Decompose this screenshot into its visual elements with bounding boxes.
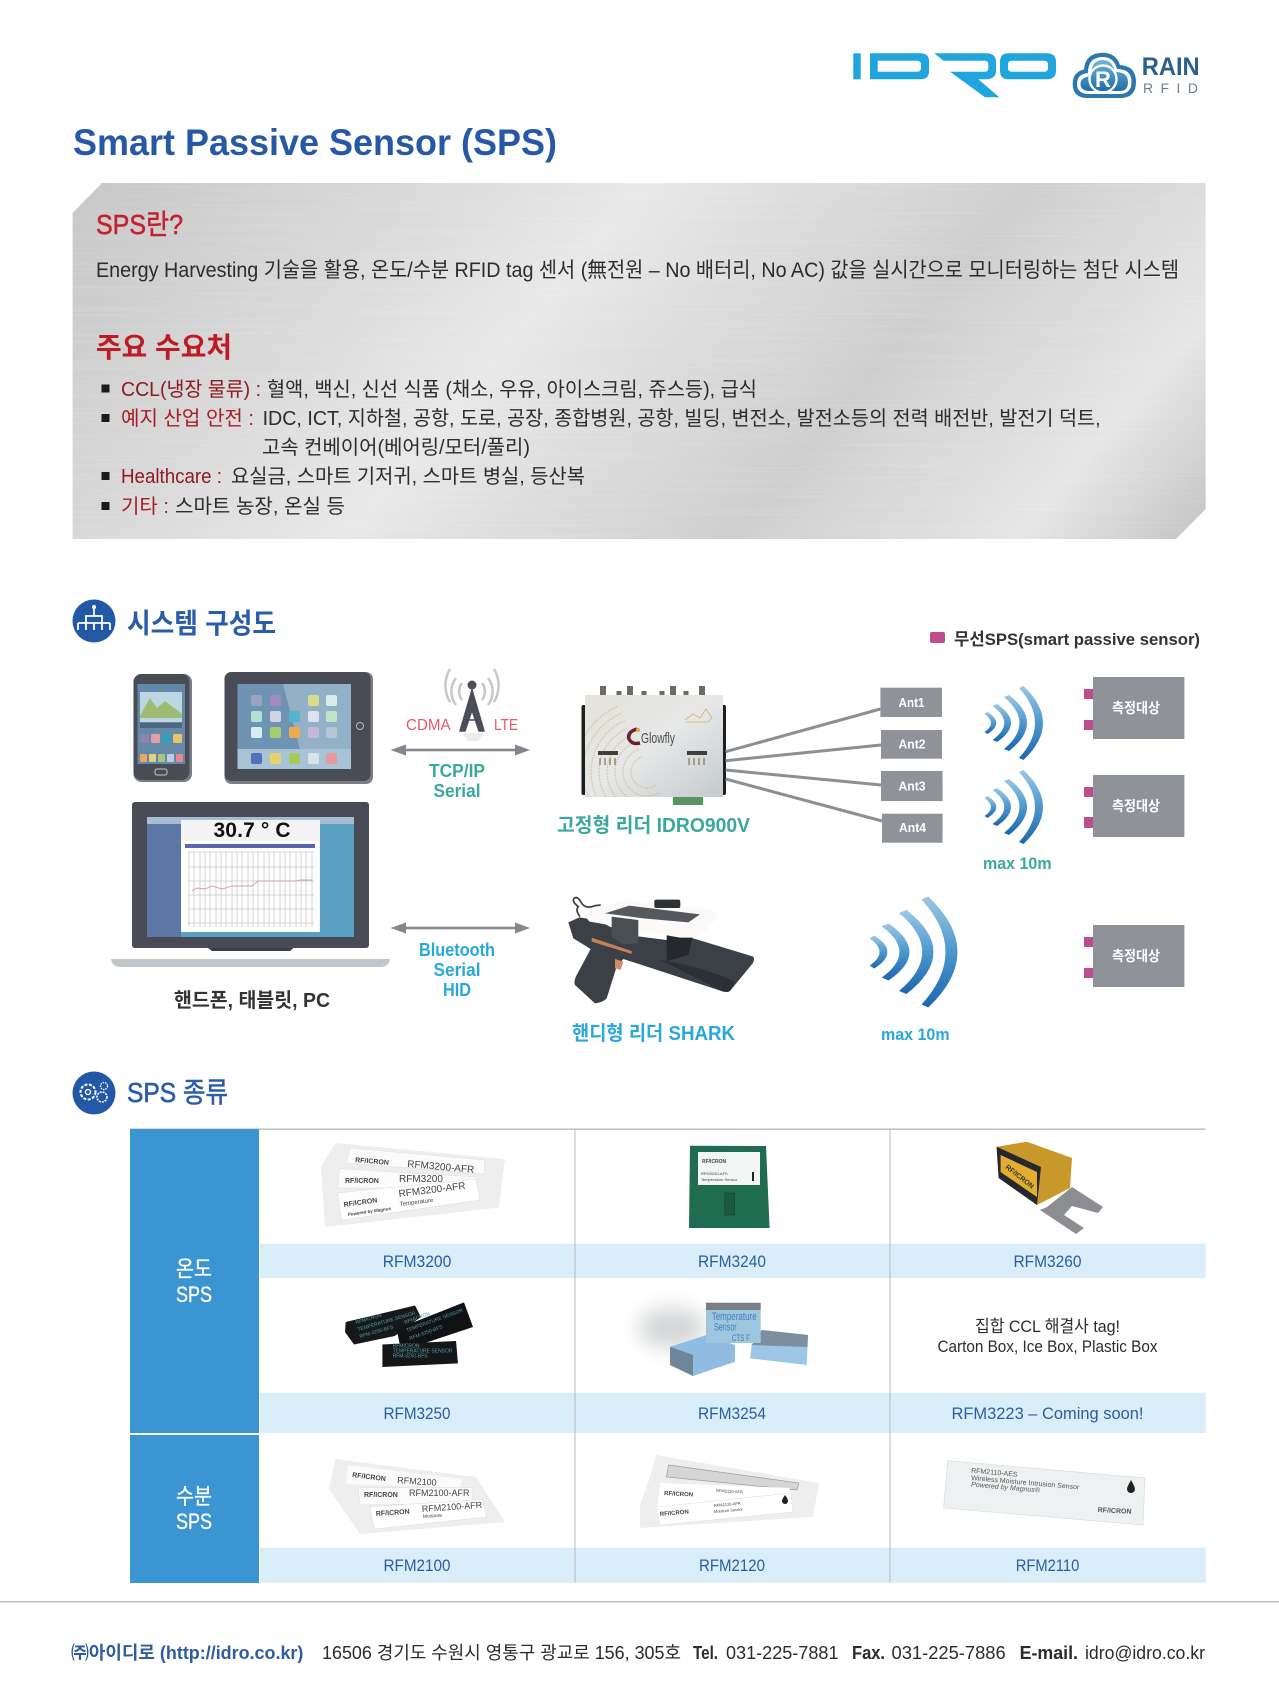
row header: moisture SPS: SPS (176, 1509, 212, 1534)
label: Bluetooth Serial HID: Serial (434, 960, 480, 980)
product image: RFM2120 tags: RF/ICRON (660, 1509, 689, 1518)
product image: RFM2120 tags: RFM2120-AFR (714, 1501, 741, 1508)
icon: smartphone (134, 674, 192, 782)
icon: system hierarchy (72, 600, 116, 642)
product image: RFM3254 tags (638, 1303, 808, 1376)
icon: cell tower (445, 669, 499, 741)
list: demand areas: CCL(냉장 물류) : (121, 378, 261, 401)
product image: RFM3200 tags (321, 1143, 505, 1227)
product image: RFM3240 tag: Temperature Sensor (701, 1177, 738, 1182)
product image: RFM3240 tag (689, 1146, 770, 1228)
label: RFM3240: RFM3240 (698, 1252, 766, 1271)
list: demand areas: 스마트 농장, 온실 등 (175, 495, 345, 518)
antennas: Ant4 (899, 820, 927, 835)
label: RFM3260: RFM3260 (1014, 1252, 1082, 1271)
product image: RFM3200 tags: RF/ICRON (343, 1197, 378, 1209)
label: RFM3250: RFM3250 (384, 1404, 450, 1423)
icon: fixed reader IDRO900V (582, 686, 726, 805)
product image: RFM3260 tag (997, 1142, 1103, 1234)
list: demand areas (102, 378, 1101, 518)
product image: RFM3250 tags: RFM-3250-BFS (393, 1354, 428, 1360)
product image: RFM2100 tags: RFM2100-AFR (409, 1488, 470, 1498)
label: RFM3200: RFM3200 (383, 1252, 451, 1271)
label: Bluetooth Serial HID: Bluetooth (419, 940, 495, 960)
target: measurement object 3: 측정대상 (1112, 948, 1160, 964)
table frame (130, 1128, 1206, 1583)
heading: main demand: 주요 수요처 (96, 332, 232, 363)
text: SPS description: Energy Harvesting 기술을 활용, 온도/수분 RFID tag 센서 (無전원 – No 배터리, No AC) 값을 실시간으로 모니터링하는 첨단 시스템 (96, 259, 1179, 282)
product image: RFM2110 tag: Powered by Magnus® (971, 1481, 1041, 1495)
icon: cloud: R (1095, 67, 1111, 92)
label: Bluetooth Serial HID (419, 940, 495, 1000)
chart readout: 30.7 ° C (214, 819, 290, 842)
product image: RFM2110 tag: RF/ICRON (1097, 1507, 1132, 1516)
product image: RFM3200 tags: RFM3200-AFR (398, 1181, 466, 1200)
product image: RFM2110 tag: Wireless Moisture Intrusion Sensor (971, 1475, 1080, 1492)
list: demand areas: 예지 산업 안전 : (121, 407, 254, 430)
label: RFM2110: RFM2110 (1016, 1556, 1079, 1575)
product image: RFM2110 tag (944, 1461, 1145, 1525)
reader brand: Glowfly (641, 730, 675, 747)
text: RFM3223 description: 집합 CCL 해결사 tag! (975, 1317, 1120, 1336)
panel: SPS overview (73, 183, 1206, 539)
product image: RFM2120 tags: Moisture Sensor (714, 1506, 744, 1514)
title: Smart Passive Sensor (SPS) (73, 122, 557, 163)
product image: RFM3240 tag: RFM3240-AFS (701, 1171, 728, 1176)
footer: company contact: 031-225-7886 (892, 1643, 1006, 1663)
table: SPS types (130, 1128, 1206, 1583)
product image: RFM2100 tags: RFM2100 (397, 1475, 437, 1488)
product image: RFM3250 tags: TEMPERATURE SENSOR (406, 1308, 464, 1334)
product image: RFM3200 tags: Temperature (400, 1198, 434, 1208)
logo: RAIN RFID (1073, 53, 1200, 98)
heading: system configuration: 시스템 구성도 (127, 608, 276, 639)
label: range handheld: max 10m (881, 1025, 950, 1044)
product image: RFM3200 tags: RF/ICRON (345, 1178, 379, 1185)
product image: RFM3250 tags: RFM-3250-BFS (359, 1324, 395, 1340)
label: devices: 핸드폰, 태블릿, PC (174, 989, 330, 1012)
target: measurement object 1: 측정대상 (1112, 700, 1160, 716)
antennas (880, 688, 943, 843)
product image: RFM3200 tags: RFM3200-AFR (407, 1159, 475, 1176)
list: demand areas: IDC, ICT, 지하철, 공항, 도로, 공장, 종합병원, 공항, 빌딩, 변전소, 발전소등의 전력 배전반, 발전기 덕트, (263, 407, 1101, 430)
footer: company contact: Fax. (852, 1643, 885, 1663)
row header: temperature SPS: 온도 (176, 1256, 212, 1282)
row header: moisture SPS (130, 1435, 259, 1583)
icon: tablet (224, 672, 373, 784)
product image: RFM3200 tags: Powered by Magnus (347, 1206, 392, 1217)
product image: RFM3200 tags: RFM3200 (399, 1174, 443, 1185)
list: demand areas: 혈액, 백신, 신선 식품 (채소, 우유, 아이스크림, 쥬스등), 급식 (267, 378, 757, 401)
target: measurement object 2 (1084, 775, 1184, 837)
product image: RFM2100 tags: RF/ICRON (376, 1509, 410, 1518)
logo: RAIN RFID: RAIN (1142, 53, 1200, 81)
icon: gears (72, 1072, 116, 1114)
target: measurement object 3 (1084, 925, 1184, 987)
footer: company contact: idro@idro.co.kr (1085, 1643, 1205, 1663)
row header: moisture SPS: 수분 (176, 1484, 212, 1509)
product image: RFM3250 tags: TEMPERATURE SENSOR (357, 1311, 417, 1333)
footer: company contact (71, 1643, 1205, 1663)
product image: RFM2100 tags: RFM2100-AFR (421, 1500, 483, 1514)
text: RFM3223 description (938, 1317, 1158, 1356)
panel background (73, 183, 1206, 539)
product image: RFM3250 tags: RFMICRON (355, 1313, 383, 1326)
icon: laptop with temperature chart (111, 802, 390, 967)
product image: RFM2100 tags: Moisture (423, 1513, 442, 1520)
row header: temperature SPS (130, 1129, 259, 1433)
logo: RAIN RFID: RFID (1143, 80, 1198, 96)
product image: RFM2100 tags: RF/ICRON (364, 1492, 398, 1499)
label: TCP/IP Serial: TCP/IP (429, 761, 485, 781)
product image: RFM2120 tags (640, 1455, 819, 1528)
product image: RFM2100 tags (329, 1459, 505, 1534)
list: demand areas: Healthcare : (121, 466, 222, 488)
label: fixed reader: 고정형 리더 IDRO900V (557, 814, 751, 837)
footer: company contact: ㈜아이디로 (http://idro.co.kr) (71, 1643, 303, 1663)
antennas: Ant3 (898, 778, 926, 794)
label: range fixed reader: max 10m (983, 854, 1052, 873)
arrow: TCP/IP link (391, 744, 530, 756)
product image: RFM3250 tags: RFMICRON (393, 1344, 420, 1350)
product image: RFM3254 tags: CTS F (732, 1333, 750, 1343)
product image: RFM3260 tag: RF/ICRON (1004, 1164, 1035, 1190)
row header: temperature SPS: SPS (176, 1282, 212, 1307)
label: RFM2100: RFM2100 (384, 1556, 450, 1575)
label: RFM2120: RFM2120 (699, 1556, 765, 1575)
label: RFM3223: RFM3223 – Coming soon! (952, 1404, 1144, 1423)
connectors: reader to antennas (726, 709, 882, 821)
product image: RFM3254 tags: Sensor (714, 1322, 737, 1334)
label: Bluetooth Serial HID: HID (443, 980, 471, 1000)
label: LTE: LTE (494, 717, 518, 734)
legend: wireless SPS: 무선SPS(smart passive sensor) (954, 630, 1200, 649)
product image: RFM3250 tags: TEMPERATURE SENSOR (393, 1348, 453, 1354)
product image: RFM3240 tag: RF/ICRON (702, 1159, 727, 1165)
arrow: Bluetooth link (391, 922, 530, 934)
product image: RFM3250 tags: RFM-3250-BFS (409, 1324, 444, 1342)
product image: RFM2100 tags: RF/ICRON (352, 1472, 386, 1483)
text: RFM3223 description: Carton Box, Ice Box, Plastic Box (938, 1337, 1158, 1356)
icon: handheld reader SHARK (568, 898, 754, 1003)
product image: RFM2120 tags: RF/ICRON (664, 1491, 693, 1499)
list: demand areas: 기타 : (121, 495, 169, 518)
antennas: Ant2 (898, 736, 926, 752)
label: CDMA: CDMA (406, 717, 451, 734)
heading: SPS types: SPS 종류 (127, 1077, 228, 1108)
product image: RFM3254 tags: Temperature (712, 1311, 757, 1323)
icon: radio waves upper (984, 686, 1043, 760)
logo: IDRO (853, 53, 1056, 97)
product image: RFM2120 tags: RFM2120-AFR (716, 1488, 743, 1494)
label: TCP/IP Serial (429, 761, 485, 801)
target: measurement object 1 (1084, 677, 1184, 739)
label: TCP/IP Serial: Serial (434, 781, 480, 801)
footer: company contact: 16506 경기도 수원시 영통구 광교로 156, 305호 (322, 1643, 681, 1663)
label: handheld reader: 핸디형 리더 SHARK (572, 1022, 736, 1045)
antennas: Ant1 (898, 695, 924, 710)
product image: RFM2110 tag: RFM2110-AES (971, 1468, 1018, 1479)
target: measurement object 2: 측정대상 (1112, 798, 1160, 814)
list: demand areas: 요실금, 스마트 기저귀, 스마트 병실, 등산복 (231, 465, 585, 488)
icon: radio waves large (870, 896, 958, 1008)
footer: company contact: E-mail. (1020, 1643, 1078, 1663)
product image: RFM3250 tags: RFMICRON (404, 1311, 431, 1326)
product image: RFM3250 tags (345, 1302, 473, 1367)
icon: radio waves lower (984, 770, 1043, 844)
label: RFM3254: RFM3254 (698, 1404, 766, 1423)
list: demand areas: 고속 컨베이어(베어링/모터/풀리) (262, 436, 530, 459)
footer: company contact: Tel. (693, 1643, 718, 1663)
heading: what is SPS: SPS란? (96, 209, 183, 240)
footer: company contact: 031-225-7881 (726, 1643, 838, 1663)
product image: RFM3200 tags: RF/ICRON (355, 1157, 389, 1167)
